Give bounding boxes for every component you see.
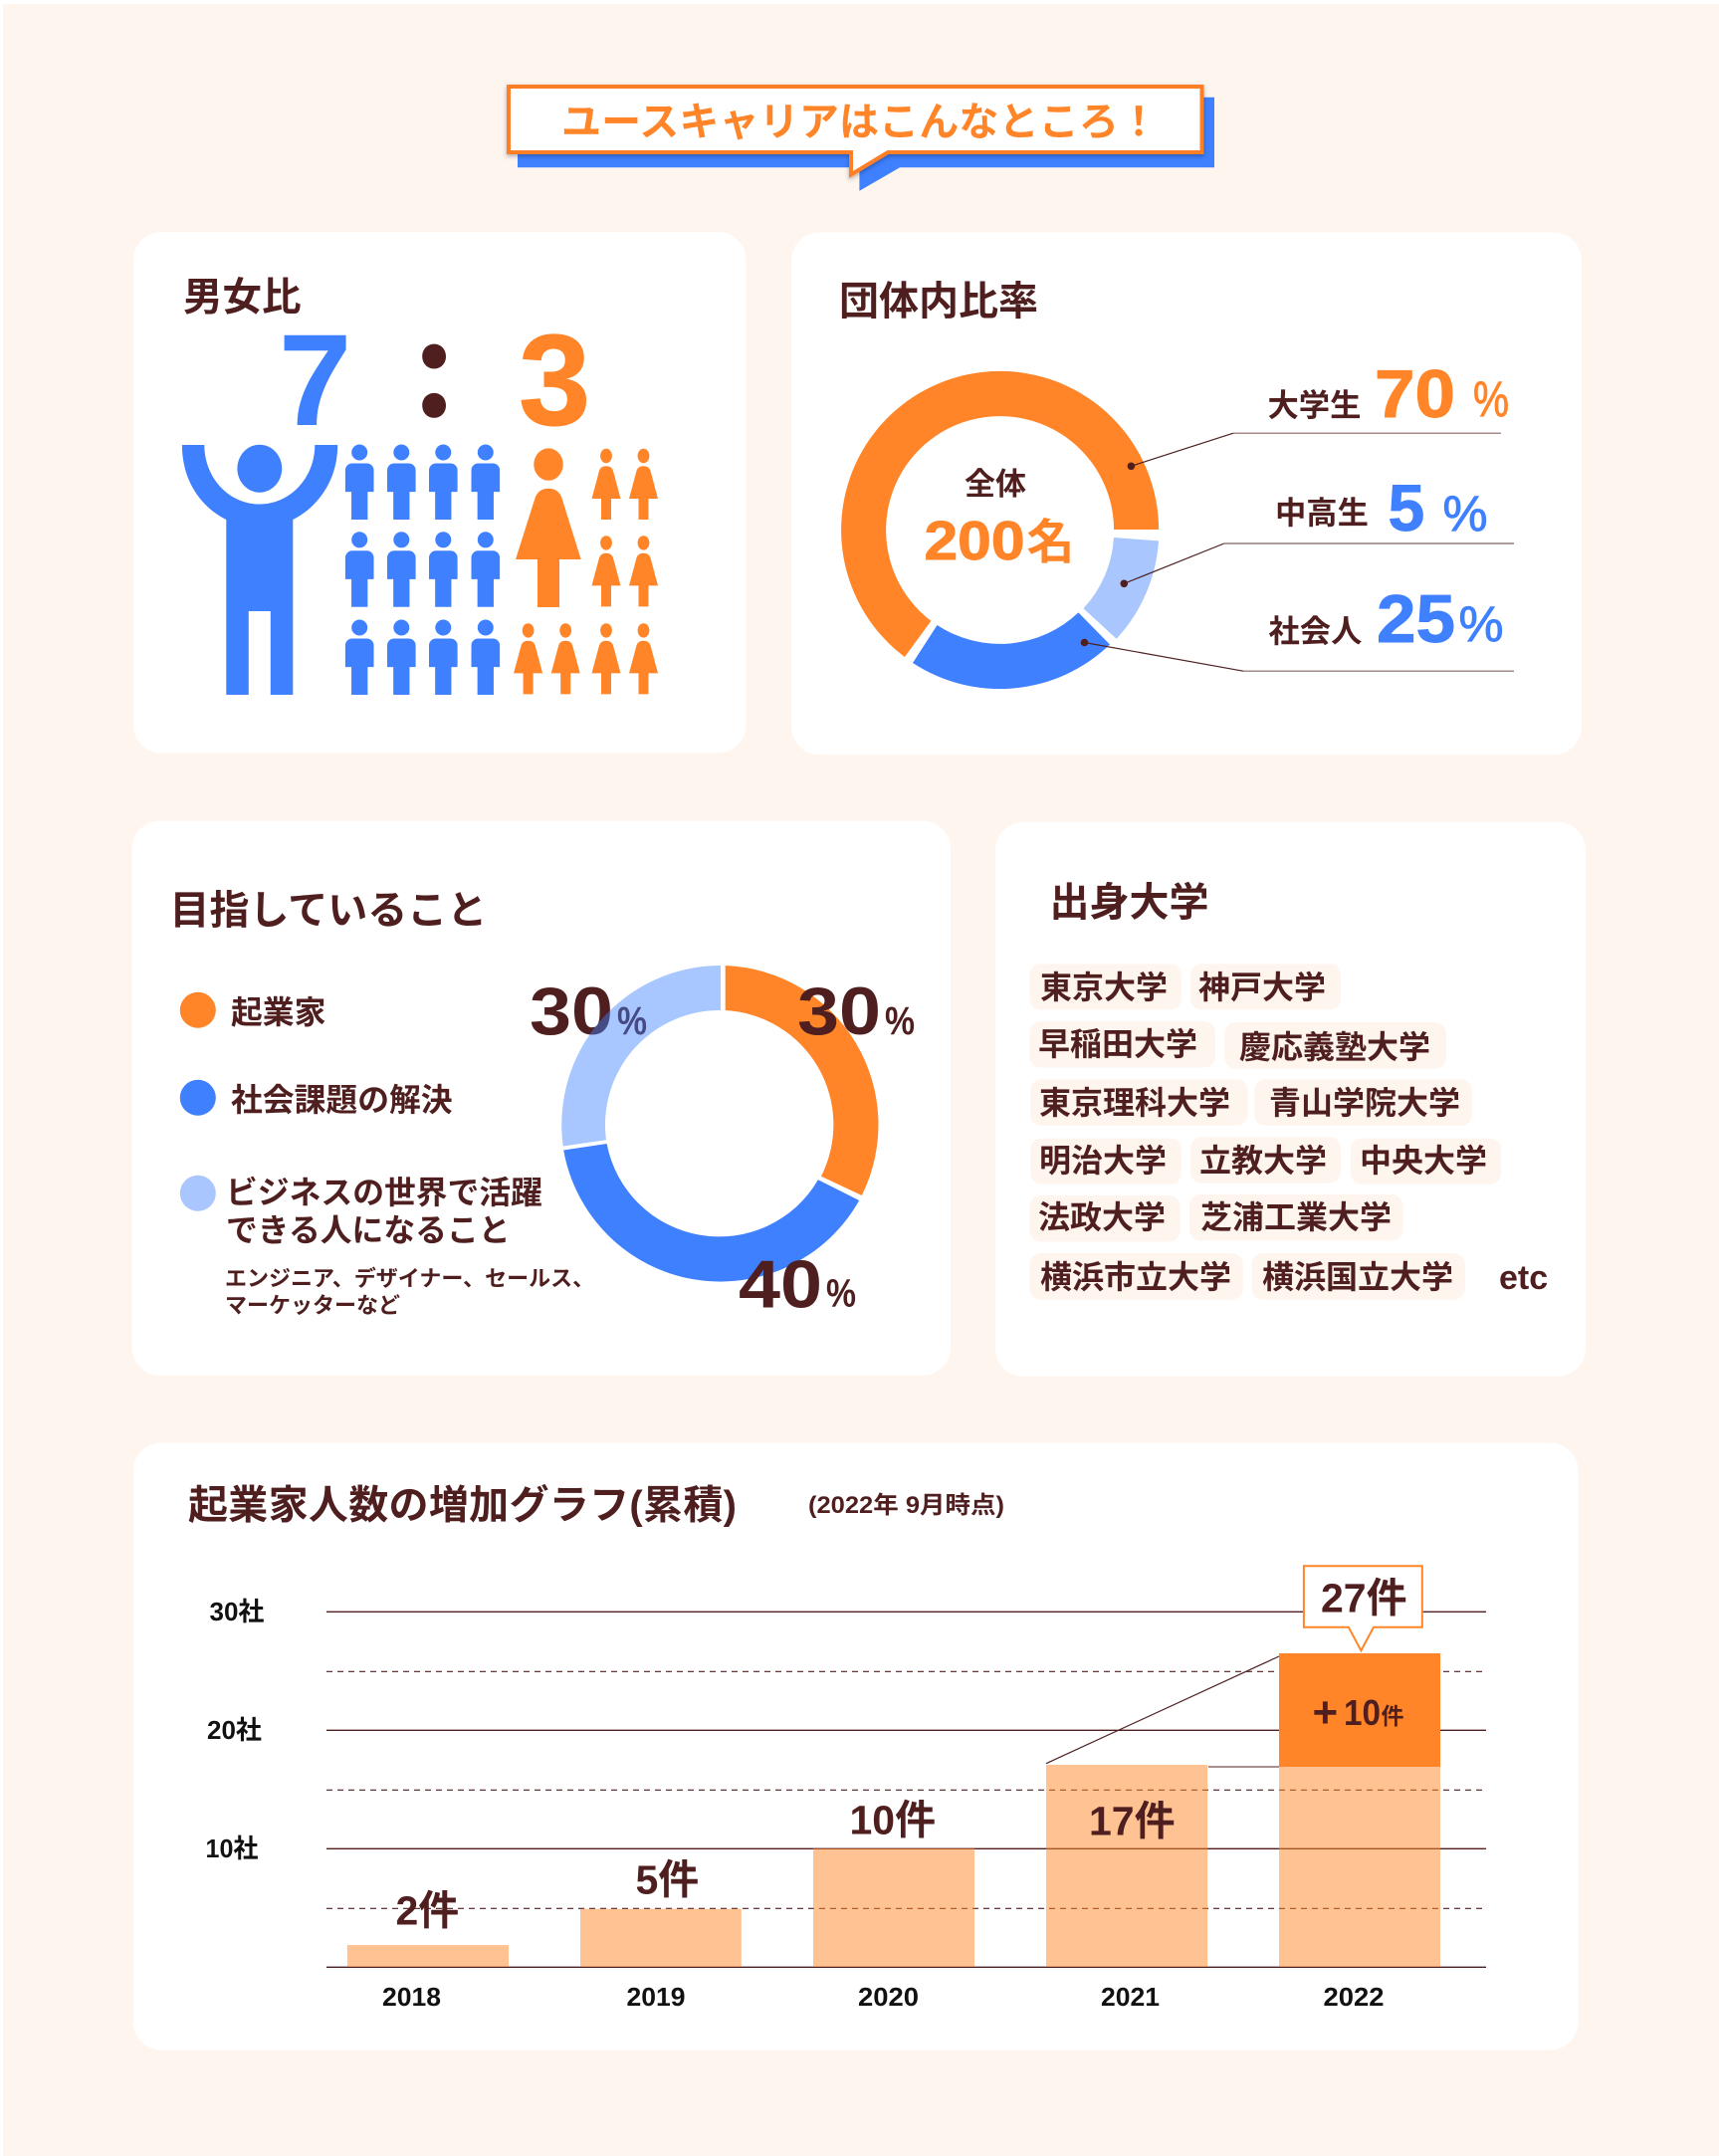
percentage label: 30% right (797, 973, 915, 1049)
percentage label: 30% left (530, 973, 647, 1049)
label: working adults 25% (1268, 581, 1503, 657)
percentage label: 40% (739, 1246, 856, 1322)
label: high school 5%: % (1443, 486, 1487, 541)
panel: goals (132, 821, 951, 1376)
tag: 芝浦工業大学: 芝浦工業大学 (1200, 1199, 1392, 1235)
tag: 立教大学 (1190, 1137, 1341, 1184)
label: working adults 25%: 25 (1377, 581, 1455, 657)
tag: 横浜国立大学 (1252, 1253, 1465, 1300)
tag: 明治大学: 明治大学 (1039, 1143, 1167, 1179)
tag: 中央大学: 中央大学 (1360, 1143, 1487, 1179)
panel: growth chart (133, 1443, 1579, 2050)
tag: 明治大学 (1030, 1139, 1182, 1185)
tag: 東京大学 (1029, 964, 1182, 1009)
legend: active in business (180, 1175, 594, 1318)
label: university 70%: 大学生 (1268, 388, 1361, 423)
growth connector lines (1046, 1656, 1279, 1767)
x axis labels (382, 1982, 1384, 2012)
tag: 横浜市立大学: 横浜市立大学 (1040, 1259, 1231, 1295)
legend: active in business: エンジニア、デザイナー、セールス、 (225, 1266, 594, 1291)
y axis labels (205, 1597, 264, 1863)
x axis labels: 2022 (1324, 1982, 1384, 2012)
tag: 慶応義塾大学: 慶応義塾大学 (1239, 1029, 1430, 1065)
tag: 東京大学: 東京大学 (1040, 970, 1168, 1005)
legend: active in business: できる人になること (226, 1212, 511, 1248)
percentage label: 40%: % (826, 1272, 856, 1316)
legend: solving social issues: 社会課題の解決 (231, 1082, 453, 1118)
callout: 27件: 27件 (1321, 1575, 1407, 1620)
label: working adults 25%: % (1459, 596, 1503, 652)
heading: membership ratio: 団体内比率 (839, 280, 1038, 323)
callout: 27件 (1304, 1566, 1422, 1650)
ratio colon: : (413, 267, 455, 454)
legend: active in business: マーケッターなど (225, 1293, 400, 1318)
percentage label: 30% left: 30 (530, 973, 613, 1049)
tag: 早稲田大学 (1029, 1021, 1215, 1068)
icon: large woman (516, 448, 581, 607)
leader line: high school (1121, 543, 1514, 587)
tag: 横浜国立大学: 横浜国立大学 (1262, 1259, 1453, 1295)
note: as of date: (2022年 9月時点) (808, 1492, 1004, 1519)
heading: growth chart: 起業家人数の増加グラフ(累積) (188, 1483, 737, 1527)
value label: 5件: 5件 (635, 1857, 699, 1903)
bar: 2021 (1046, 1765, 1207, 1967)
percentage label: 30% left: % (617, 999, 647, 1043)
tag: 慶応義塾大学 (1224, 1022, 1446, 1069)
tag: 中央大学 (1351, 1139, 1501, 1185)
bar: 2022 (1279, 1653, 1440, 1967)
label: university 70%: % (1473, 371, 1509, 427)
tag: 立教大学: 立教大学 (1199, 1143, 1327, 1179)
bar: 2018 (347, 1945, 509, 1967)
x axis labels: 2019 (627, 1982, 685, 2012)
value label: +10件: 10 (1344, 1692, 1381, 1733)
banner title (509, 87, 1214, 191)
label: university 70%: 70 (1375, 356, 1455, 432)
grid lines (326, 1612, 1486, 1967)
value label: +10件: + (1312, 1688, 1338, 1737)
tag: 法政大学 (1029, 1195, 1181, 1242)
value label: 2件: 2件 (396, 1887, 459, 1933)
bar: 2020 (813, 1848, 974, 1967)
legend: entrepreneur (180, 992, 325, 1030)
donut chart: goals (561, 966, 878, 1282)
icon grid: small women (514, 449, 658, 694)
legend: active in business: ビジネスの世界で活躍 (226, 1175, 542, 1210)
x axis labels: 2021 (1101, 1982, 1160, 2012)
percentage label: 30% right: 30 (797, 973, 881, 1049)
ratio number 7: 7 (279, 308, 351, 453)
y axis labels: 10社 (205, 1833, 259, 1863)
leader line: working adults (1081, 639, 1514, 671)
tag: 青山学院大学: 青山学院大学 (1269, 1085, 1460, 1121)
bar: 2019 (580, 1909, 742, 1967)
x axis labels: 2020 (858, 1982, 919, 2012)
donut chart: membership (841, 371, 1159, 689)
tag: 芝浦工業大学 (1189, 1194, 1403, 1240)
tag: 横浜市立大学 (1029, 1253, 1243, 1300)
tag: 法政大学: 法政大学 (1038, 1199, 1166, 1235)
percentage label: 30% right: % (885, 999, 915, 1043)
icon: large man (182, 445, 337, 695)
heading: gender ratio: 男女比 (183, 276, 301, 320)
tag: 神戸大学 (1190, 964, 1341, 1009)
icon grid: small men (345, 444, 500, 695)
value label: +10件: 件 (1382, 1703, 1403, 1729)
value label: +10件 (1312, 1688, 1403, 1737)
y axis labels: 30社 (209, 1597, 264, 1626)
percentage label: 40%: 40 (739, 1246, 822, 1322)
legend: entrepreneur: 起業家 (231, 994, 325, 1030)
label: high school 5% (1275, 471, 1487, 544)
donut centre total: 全体 (965, 467, 1026, 502)
banner title: ユースキャリアはこんなところ！ (561, 101, 1159, 144)
ratio number 3: 3 (519, 308, 590, 453)
tag: 早稲田大学: 早稲田大学 (1038, 1026, 1197, 1062)
label: university 70% (1268, 356, 1509, 432)
panel: gender ratio (133, 232, 747, 753)
text: etc: etc (1499, 1259, 1548, 1297)
heading: goals: 目指していること (169, 889, 487, 933)
label: working adults 25%: 社会人 (1268, 614, 1362, 649)
tag: 東京理科大学: 東京理科大学 (1039, 1085, 1230, 1121)
heading: universities: 出身大学 (1049, 881, 1208, 925)
label: high school 5%: 5 (1388, 471, 1424, 544)
x axis labels: 2018 (382, 1982, 441, 2012)
y axis labels: 20社 (207, 1715, 262, 1745)
leader line: university (1128, 433, 1501, 470)
tag: 神戸大学: 神戸大学 (1198, 970, 1326, 1005)
tag: 青山学院大学 (1254, 1079, 1472, 1126)
panel: membership ratio (791, 232, 1582, 755)
donut centre total: 200 (924, 510, 1025, 571)
panel: universities (995, 822, 1586, 1377)
label: high school 5%: 中高生 (1275, 496, 1369, 531)
tag: 東京理科大学 (1030, 1079, 1248, 1126)
value label: 10件: 10件 (850, 1798, 936, 1843)
value label: 17件: 17件 (1089, 1798, 1176, 1843)
donut centre total (924, 467, 1075, 571)
donut centre total: 名 (1027, 517, 1075, 569)
